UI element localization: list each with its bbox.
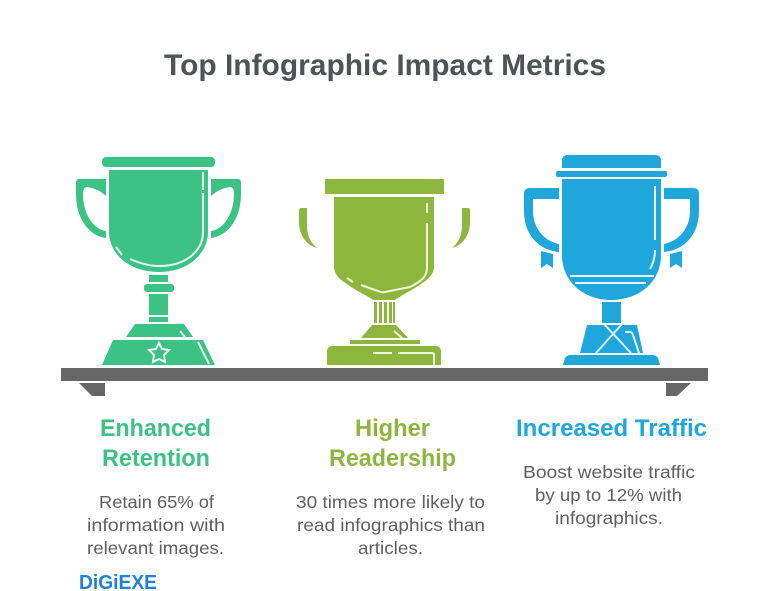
text: traffic description <box>523 462 695 528</box>
title: Top Infographic Impact Metrics <box>164 49 606 82</box>
text: retention description: relevant images. <box>87 538 224 558</box>
heading: increased traffic: Increased Traffic <box>516 415 707 442</box>
icon: olive trophy <box>299 179 470 365</box>
icon: green trophy <box>76 157 241 365</box>
icon: star <box>149 343 169 362</box>
column: enhanced retention <box>87 415 225 558</box>
shelf <box>61 368 708 396</box>
text: retention description: Retain 65% of <box>99 492 214 512</box>
text: readership description: 30 times more likely to <box>296 492 485 512</box>
text: traffic description: by up to 12% with <box>535 485 682 505</box>
column: increased traffic <box>516 415 707 528</box>
text: retention description: information with <box>87 515 225 535</box>
column: higher readership <box>296 415 485 558</box>
text: readership description: articles. <box>358 538 423 558</box>
heading: enhanced retention <box>100 415 211 472</box>
text: readership description <box>296 492 485 558</box>
heading: higher readership <box>329 415 456 472</box>
heading: higher readership: Readership <box>329 445 456 472</box>
heading: enhanced retention: Enhanced <box>100 415 211 442</box>
heading: enhanced retention: Retention <box>102 445 210 472</box>
text: traffic description: Boost website traffic <box>523 462 695 482</box>
icon: blue trophy <box>524 155 699 365</box>
text: retention description <box>87 492 225 558</box>
text: traffic description: infographics. <box>555 508 663 528</box>
text: readership description: read infographics than <box>297 515 485 535</box>
heading: higher readership: Higher <box>355 415 430 442</box>
